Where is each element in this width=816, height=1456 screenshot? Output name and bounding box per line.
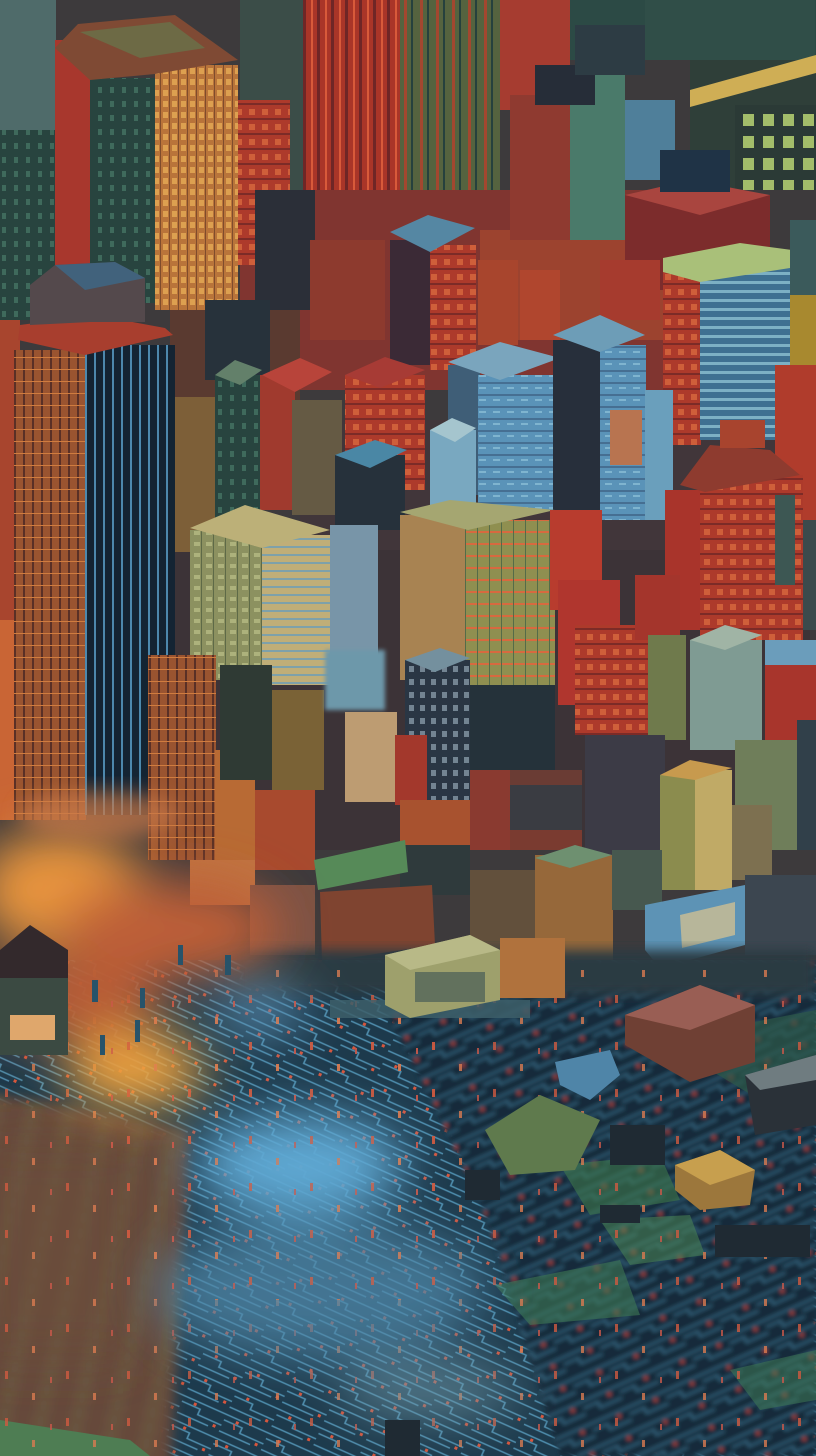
building: dark green column [215, 360, 262, 525]
street: blurred shoreline under the buildings [235, 950, 816, 995]
building: top red block [238, 100, 290, 265]
glow: blue water reflection [155, 990, 520, 1420]
ground: warm left circuit region [0, 1090, 190, 1456]
building: olive and stripes block [190, 505, 330, 685]
building: yellow-brown low block [675, 1150, 755, 1210]
building: red tower right [665, 420, 803, 640]
building: navy grey tower [405, 648, 470, 800]
crowd along the street [92, 945, 530, 1055]
city background haze [0, 0, 816, 1000]
building: dark navy mid tower cap [205, 260, 660, 380]
background wall: left midtones [0, 0, 100, 820]
glow: orange plaza [0, 830, 280, 1108]
building: blue-grey slab [330, 525, 378, 700]
building: right low cluster [612, 850, 816, 955]
building: dark teal block [255, 190, 385, 340]
building: large blue block [448, 342, 561, 510]
building: red low block [395, 735, 427, 805]
building: dark left pavilion [0, 925, 68, 1055]
building: tall navy tower [14, 262, 175, 820]
building: glowing blue slab [325, 650, 385, 710]
building: scattered dark chips [385, 1125, 810, 1456]
ground: green patch left [0, 1420, 150, 1456]
building: dark capped tower [625, 150, 770, 290]
building: lit olive tower top right [690, 55, 816, 190]
building: orange-green double tower [400, 500, 555, 770]
building: green roof [314, 840, 408, 890]
building: pale orange slab [345, 712, 397, 802]
building: brown olive block [470, 845, 613, 970]
building: blue and red right tower [765, 640, 816, 740]
background wall: centre towers [160, 0, 816, 850]
ground: circuit board base [0, 960, 816, 1456]
building: dark and blue block [553, 315, 673, 520]
building: brown roofed block [625, 985, 755, 1082]
building: maroon and orange block [390, 215, 476, 370]
building: pale olive temple [385, 935, 500, 1018]
building: olive yellow tower [660, 760, 732, 890]
building: dark olive block [220, 665, 324, 790]
ground specks over glow [100, 1000, 450, 1300]
building: grey-green right block [732, 720, 816, 880]
building: dark block right [745, 1055, 816, 1135]
building: low street blocks row [190, 790, 470, 955]
building: upper teal cluster [510, 0, 815, 240]
building: red-brown block [260, 358, 342, 515]
glow: base of the navy tower [20, 791, 180, 839]
building: grey-green tower [690, 625, 762, 750]
building: orange block beside temple [500, 938, 565, 998]
building: olive-brown column [175, 397, 215, 552]
building: right edge blocks [775, 220, 816, 630]
building: small dark block with blue cap [335, 440, 407, 530]
building: brown-red long block [320, 885, 435, 962]
green circuit patches [495, 1010, 816, 1410]
ground red specks [0, 960, 816, 1456]
building: red cluster [550, 510, 686, 740]
building: brown slim tower [148, 655, 255, 860]
building: top-left tower [55, 15, 238, 310]
building: blue-green tower right [663, 243, 792, 445]
ground: dark right circuit region [380, 960, 816, 1456]
building: pale blue small tower [430, 418, 476, 515]
building: low mixed row [400, 735, 665, 855]
building: red block centre [345, 357, 425, 490]
building: blue billboard block [645, 885, 745, 968]
building: green-olive low block [485, 1095, 600, 1175]
street: lower left warm haze [0, 1140, 130, 1360]
building: small blue roof [555, 1050, 620, 1100]
